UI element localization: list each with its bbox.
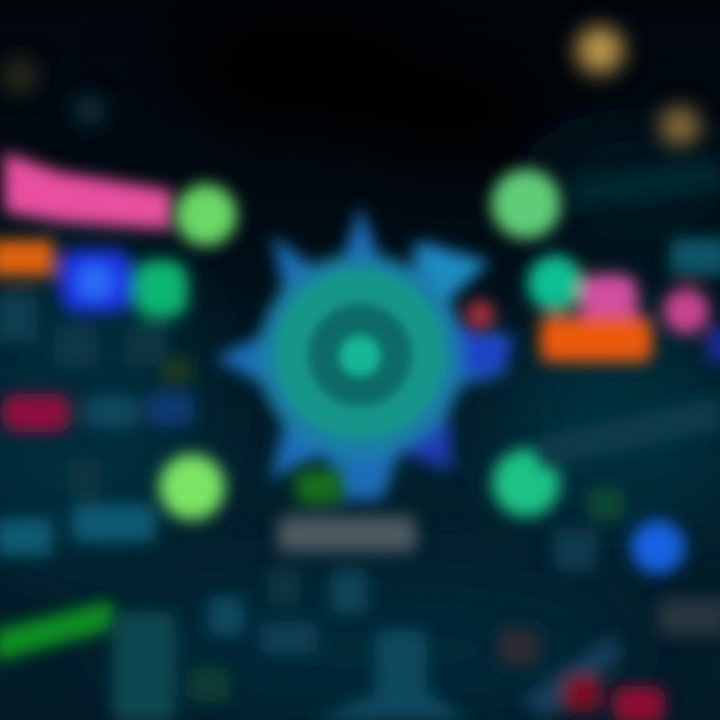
bottom red dots [564, 676, 602, 712]
crimson block [2, 394, 70, 432]
left green node [175, 184, 237, 246]
pink dot [663, 288, 709, 334]
teal and blue chips [86, 396, 138, 428]
blue dot [631, 520, 685, 574]
blue block [60, 250, 132, 312]
red dot [465, 300, 495, 330]
gear hub [275, 269, 445, 439]
pink chip [580, 274, 638, 324]
far right blue [708, 328, 720, 362]
pink bar [4, 152, 172, 230]
teal row [0, 292, 37, 342]
teal node [527, 255, 583, 311]
gear teeth and body [215, 205, 510, 500]
bottom caption blocks [112, 470, 720, 720]
upper right green node [491, 169, 561, 239]
blue lower right tooth [395, 420, 452, 472]
left legend blocks [0, 152, 194, 662]
teal bar top right [670, 238, 720, 276]
orange bar [0, 240, 54, 276]
green slanted bar [0, 600, 118, 662]
central gear [215, 205, 515, 500]
faint bar right [575, 158, 720, 208]
lower right green node [492, 449, 560, 517]
cyan upper right tooth [408, 245, 490, 300]
lower left green node [159, 454, 225, 520]
gear ring [258, 254, 462, 458]
dark green chip [588, 488, 624, 520]
orange bar [540, 316, 652, 362]
green block [134, 260, 188, 318]
top nodes [2, 26, 700, 146]
right cluster [465, 158, 720, 574]
blue right tooth [445, 320, 515, 375]
lower left teal bars [0, 518, 53, 556]
